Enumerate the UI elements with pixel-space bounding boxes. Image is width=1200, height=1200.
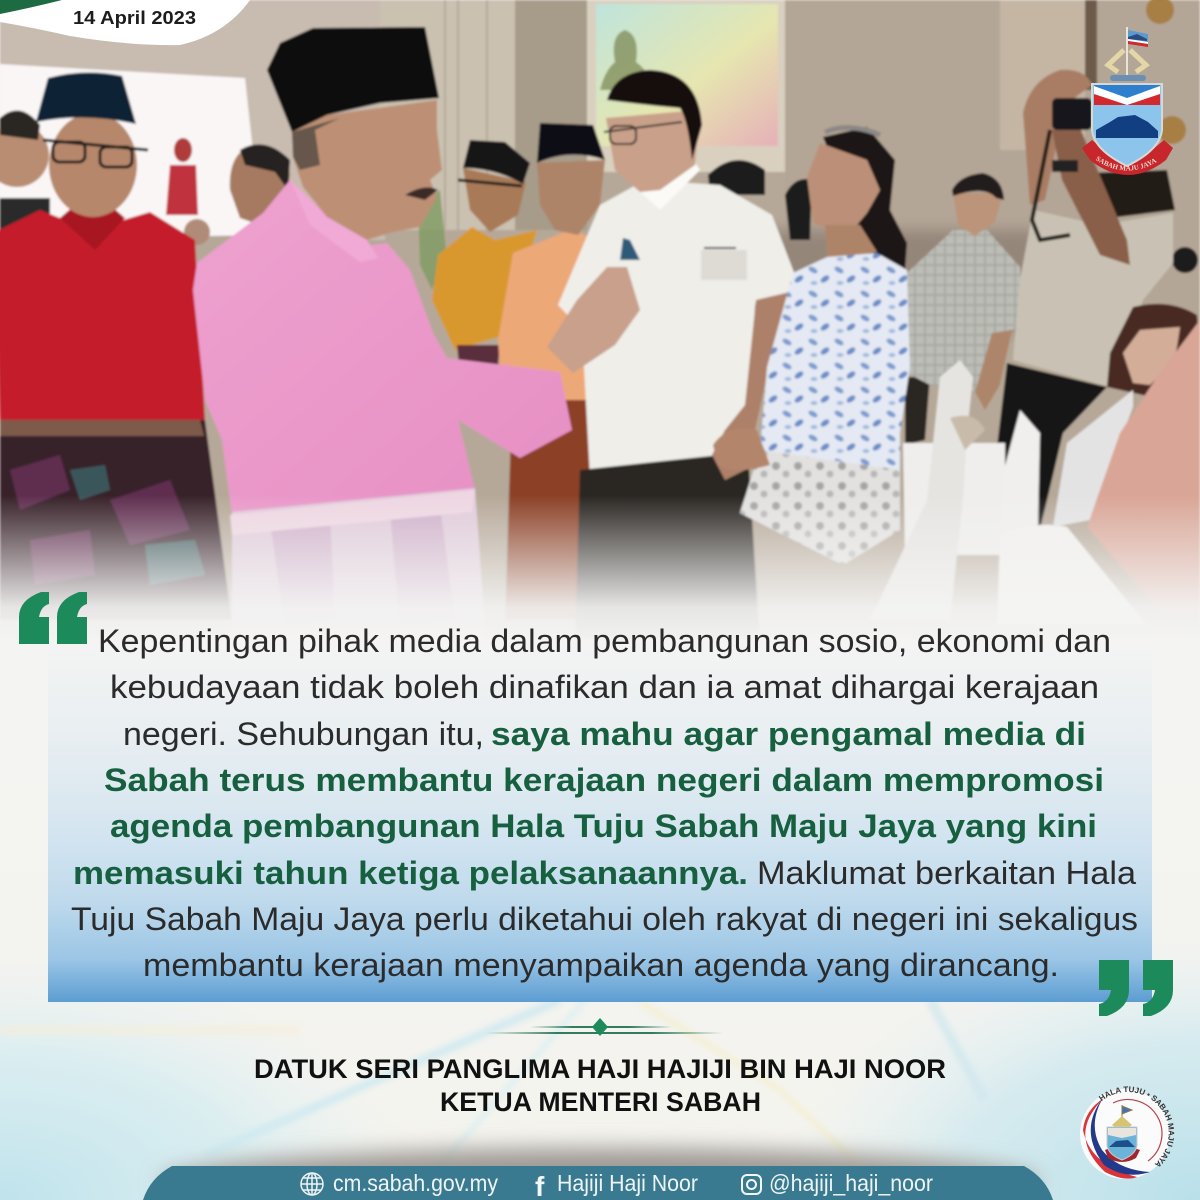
person: man in white shirt — [558, 70, 795, 640]
person: photographer — [993, 70, 1175, 530]
photo: bright banner at left — [0, 64, 262, 240]
footer: teal bar — [143, 1166, 1053, 1200]
logo: crest flag — [1122, 1105, 1132, 1125]
person: main figure in pink baju — [193, 27, 640, 640]
icon: closing quotation mark — [1099, 960, 1173, 1016]
coat of arms: scroll — [1082, 140, 1173, 175]
logo: white disc — [1080, 1089, 1170, 1179]
quote line 1: Kepentingan pihak media dalam pembangunan sosio, ekonomi dan — [98, 623, 1111, 659]
header: green accent — [0, 0, 62, 14]
footer: facebook name: Hajiji Haji Noor — [557, 1170, 698, 1196]
person: man in red baju — [0, 72, 232, 620]
date: 14 April 2023 — [73, 8, 196, 28]
icon: instagram — [742, 1175, 761, 1194]
quote line 6 highlight: memasuki tahun ketiga pelaksanaannya. — [73, 855, 748, 891]
person: seated woman in lace — [1053, 304, 1200, 527]
background: right cyan glow — [780, 940, 1200, 1200]
photo: dark background heads — [708, 160, 1198, 273]
attribution: name: DATUK SERI PANGLIMA HAJI HAJIJI BIN HAJI NOOR — [254, 1054, 946, 1084]
quote line 4 highlight: Sabah terus membantu kerajaan negeri dalam mempromosi — [104, 762, 1104, 798]
coat of arms: white chevron — [1094, 86, 1160, 105]
coat of arms: wreath — [1110, 75, 1146, 81]
person: pink shawl at right edge — [1087, 320, 1200, 620]
divider: green diamond with lines — [486, 1018, 723, 1036]
logo: scroll — [1105, 1148, 1140, 1162]
panel: blue gradient behind the quote — [48, 640, 1152, 1002]
quote line 5 highlight: agenda pembangunan Hala Tuju Sabah Maju Jaya yang kini — [110, 808, 1097, 844]
coat of arms: flag — [1126, 27, 1148, 77]
coat of arms: crest arms — [1108, 50, 1146, 72]
coat of arms: motto: SABAH MAJU JAYA — [1096, 156, 1157, 170]
quote line 3 highlight: saya mahu agar pengamal media di — [491, 716, 1086, 752]
quote line 7: Tuju Sabah Maju Jaya perlu diketahui oleh rakyat di negeri ini sekaligus — [71, 901, 1138, 937]
logo: shield — [1107, 1127, 1137, 1160]
photo: figure on the slide — [600, 30, 654, 90]
icon: Sabah coat of arms — [1082, 27, 1173, 175]
logo: red crescent — [1083, 1098, 1137, 1179]
photo: pale wall column — [1000, 0, 1085, 150]
photo: slide on the screen — [596, 4, 778, 146]
quote line 3 start: negeri. Sehubungan itu, — [123, 716, 484, 752]
footer: website: cm.sabah.gov.my — [333, 1170, 498, 1196]
logo: navy crescent — [1091, 1098, 1150, 1175]
background: pale lower area — [0, 644, 1200, 1200]
coat of arms: Mount Kinabalu — [1096, 115, 1158, 138]
photo: wall stripes — [445, 0, 487, 230]
person: far-left guest — [0, 110, 50, 240]
coat of arms: shield — [1092, 84, 1162, 166]
photo: back wall — [0, 0, 1200, 640]
logo: shield chief — [1108, 1128, 1136, 1138]
background: light rays — [0, 1000, 985, 1165]
quote line 2: kebudayaan tidak boleh dinafikan dan ia amat dihargai kerajaan — [110, 669, 1099, 705]
logo: ring text: HALA TUJU • SABAH MAJU JAYA — [1098, 1086, 1174, 1166]
person: man in peach baju — [498, 123, 605, 620]
photo: projection screen — [587, 0, 785, 172]
coat of arms: chief — [1094, 85, 1160, 104]
logo: Hala Tuju Sabah Maju Jaya — [1080, 1086, 1174, 1179]
icon: globe — [301, 1173, 323, 1195]
background: left cyan glow — [0, 960, 420, 1200]
person: man in orange baju — [432, 140, 537, 375]
footer: instagram handle: @hajiji_haji_noor — [769, 1170, 933, 1196]
logo: shield mountain — [1109, 1140, 1135, 1147]
fade: photo dissolving into white — [0, 495, 1200, 645]
photo: upper-left ceiling — [0, 0, 385, 240]
photo: light wall panels — [380, 0, 515, 230]
photo: distant crowd — [700, 230, 1040, 330]
person: man in plaid shirt — [905, 173, 1023, 445]
attribution: title: KETUA MENTERI SABAH — [440, 1087, 761, 1117]
photo: plant behind the men — [418, 190, 446, 290]
logo: crest arms — [1112, 1116, 1132, 1128]
quote line 6 end: Maklumat berkaitan Hala — [757, 855, 1136, 891]
band: shadow above the footer — [160, 1148, 1040, 1200]
coat of arms: red chevron — [1094, 88, 1160, 105]
photo: gold ball ornaments — [1146, 0, 1186, 144]
person: distant guests before the banner — [166, 138, 290, 245]
logo: inner ring — [1113, 1100, 1162, 1161]
photo: right wall panels — [785, 0, 1200, 320]
person: woman in floral blouse — [713, 127, 910, 565]
quote: body text — [71, 623, 1138, 983]
quote line 8: membantu kerajaan menyampaikan agenda yang dirancang. — [143, 947, 1059, 983]
header: white date tab — [0, 0, 250, 45]
chairs: white banquet chairs and table — [870, 360, 1147, 625]
photo: dark wall column — [515, 0, 587, 230]
icon: opening quotation mark — [19, 592, 87, 644]
photo: dark wall seam — [1085, 0, 1097, 90]
photo: reception crowd — [0, 0, 1200, 640]
